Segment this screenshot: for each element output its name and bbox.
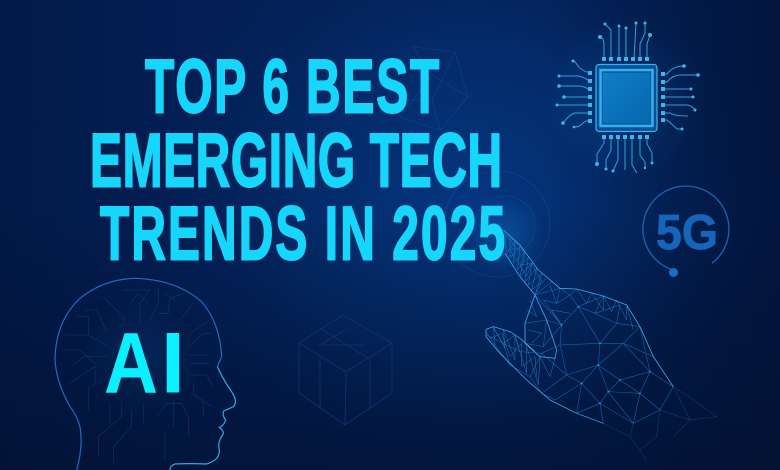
- icon: microchip: [556, 22, 700, 173]
- head outline: [55, 278, 222, 470]
- icon: AI head: [55, 278, 235, 470]
- dense finger and thumb mesh: [486, 233, 633, 385]
- AI letter A: A: [104, 316, 158, 412]
- title line 1: TOP 6 BEST: [145, 45, 439, 129]
- mesh node dots: [561, 306, 651, 404]
- AI letter I: I: [161, 316, 185, 412]
- 5G label: 5G: [656, 206, 718, 260]
- hand mesh: [487, 233, 673, 423]
- hand outline: [486, 230, 673, 423]
- chip body: [596, 64, 657, 132]
- chip circuit traces: [557, 23, 698, 173]
- chip pads and terminals: [556, 22, 700, 172]
- head circuit traces: [65, 288, 213, 463]
- faint polyhedron behind title: [400, 47, 468, 130]
- title line 3: TRENDS IN 2025: [100, 192, 505, 276]
- icon: wireframe cube: [299, 315, 392, 425]
- concentric rings around fingertip: [444, 171, 550, 277]
- icon: 5G signal circle: [643, 186, 729, 277]
- icon: low-poly hand pointing: [486, 230, 717, 460]
- wrist fading out: [603, 387, 717, 460]
- title: [90, 45, 505, 276]
- title line 2: EMERGING TECH: [90, 119, 502, 203]
